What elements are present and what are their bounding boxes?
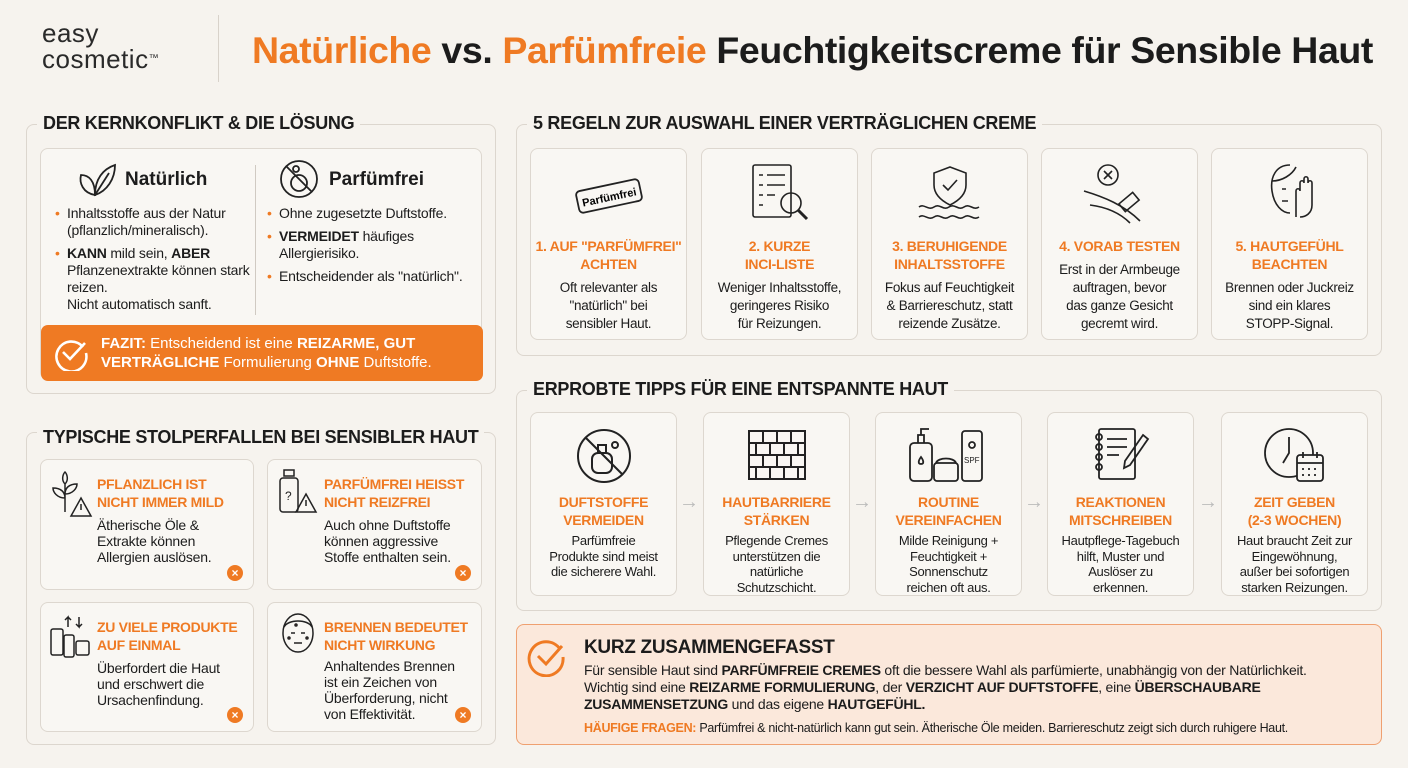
card: zu viele produkte: Ursachenfindung. [97,692,204,708]
card: duftstoffe vermeiden: Parfümfreie [572,533,635,548]
icon: products [50,615,90,658]
icon: irritated face [282,613,314,653]
card: pflanzlich: × [231,566,238,580]
card: pflanzlich [40,459,254,590]
card: brennen: ist ein Zeichen von [324,674,437,690]
card: reaktionen [1047,412,1194,596]
card: regel 4: auftragen, bevor [1073,280,1166,295]
card: brennen: NICHT WIRKUNG [324,637,435,653]
column: parfümfrei [268,160,463,284]
icon: shield waves [918,166,980,219]
arrow: → [852,491,872,513]
card: hautbarriere: STÄRKEN [744,512,809,528]
card: zu viele produkte: ZU VIELE PRODUKTE [97,619,237,635]
callout: fazit: FAZIT: Entscheidend ist eine REIZARME, GUT VERTRÄGLICHE Formulierung OHNE Duftstoffe. [101,335,432,371]
card: regel 5: 5. HAUTGEFÜHL [1235,238,1344,254]
inner comparison box [40,148,482,380]
icon: list magnifier [752,164,808,220]
title: Natürliche vs. Parfümfreie Feuchtigkeitscreme für Sensible Haut [252,29,1373,71]
card: reaktionen: REAKTIONEN [1076,494,1165,510]
icon: brick wall [748,430,806,480]
card: hautbarriere: HAUTBARRIERE [722,494,831,510]
card: regel 5: Brennen oder Juckreiz [1225,280,1354,295]
icon: plant warning [52,471,92,517]
icon: products: SPF [964,456,979,465]
icon: no perfume [577,429,631,483]
card: regel 2: Weniger Inhaltsstoffe, [718,280,841,295]
card: routine [875,412,1022,596]
text: summary: Wichtig sind eine REIZARME FORMULIERUNG, der VERZICHT AUF DUFTSTOFFE, eine ÜBERSCHAUBARE [584,679,1261,695]
card: routine: VEREINFACHEN [895,512,1002,528]
card: duftstoffe vermeiden: Produkte sind meist [549,548,658,564]
panel: 5 regeln [516,124,1382,356]
card: regel 5 [1211,148,1368,340]
heading: kurz zusammengefasst: KURZ ZUSAMMENGEFASST [584,637,835,658]
column: parfümfrei: Entscheidender als "natürlich". [279,268,463,284]
card: routine: Feuchtigkeit + [910,548,987,564]
card: duftstoffe vermeiden: DUFTSTOFFE [559,494,648,510]
panel: kernkonflikt [26,124,496,394]
card: routine: Sonnenschutz [909,564,988,579]
card: regel 3: INHALTSSTOFFE [894,256,1005,272]
card: reaktionen: Auslöser zu [1088,564,1153,579]
icon: bottle warning [279,469,318,513]
card: parfümfrei heisst: Auch ohne Duftstoffe [324,517,450,533]
logo: cosmetic™ [42,44,159,74]
card: routine: reichen oft aus. [906,580,991,594]
heading: stolperfallen: TYPISCHE STOLPERFALLEN BEI SENSIBLER HAUT [43,427,478,447]
card: duftstoffe vermeiden [530,412,677,596]
card: brennen: Überforderung, nicht [324,690,448,706]
card: duftstoffe vermeiden: die sicherere Wahl. [551,564,656,579]
icon: no perfume [280,160,318,198]
card: brennen: Anhaltendes Brennen [324,658,455,674]
card: pflanzlich: Allergien auslösen. [97,549,212,565]
panel: tipps [516,390,1382,611]
card: regel 2: 2. KURZE [749,238,810,254]
column: parfümfrei: Ohne zugesetzte Duftstoffe. [279,205,447,221]
card: regel 2: INCI-LISTE [745,256,814,272]
icon: notebook [1095,428,1150,480]
card: reaktionen: MITSCHREIBEN [1069,512,1172,528]
card: regel 2: geringeres Risiko [730,298,829,313]
card: regel 5: BEACHTEN [1252,256,1327,272]
heading: 5 regeln: 5 REGELN ZUR AUSWAHL EINER VERTRÄGLICHEN CREME [533,113,1036,133]
card: regel 4: Erst in der Armbeuge [1059,262,1180,277]
card: routine: Milde Reinigung + [899,533,998,548]
card: zu viele produkte: AUF EINMAL [97,637,180,653]
card: regel 3: reizende Zusätze. [898,316,1001,331]
card: zu viele produkte [40,602,254,732]
card: zeit geben: außer bei sofortigen [1240,564,1349,579]
card: brennen: × [459,708,466,722]
icon: products [909,428,983,482]
callout: fazit [41,325,483,381]
card: pflanzlich: Extrakte können [97,533,195,549]
card: pflanzlich: NICHT IMMER MILD [97,494,224,510]
arrow: → [679,491,699,513]
card: parfümfrei heisst: können aggressive [324,533,438,549]
card: regel 4 [1041,148,1198,340]
card: regel 4: 4. VORAB TESTEN [1059,238,1180,254]
icon: clock calendar [1264,428,1324,482]
heading: kernkonflikt: DER KERNKONFLIKT & DIE LÖSUNG [43,113,354,133]
card: parfümfrei heisst: PARFÜMFREI HEISST [324,476,464,492]
column: parfümfrei: Parfümfrei [329,169,424,190]
card: brennen [267,602,482,732]
card: hautbarriere [703,412,850,596]
icon: leaf [80,164,116,196]
icon: check circle [55,340,88,371]
icon: check circle [528,640,565,677]
card: hautbarriere: Pflegende Cremes [725,533,828,548]
card: pflanzlich: PFLANZLICH IST [97,476,206,492]
card: hautbarriere: unterstützen die [733,548,820,564]
card: parfümfrei heisst [267,459,482,590]
card: regel 5: STOPP-Signal. [1246,316,1333,331]
icon: stamp parfümfrei: Parfümfrei [581,186,637,210]
card: regel 1: 1. AUF "PARFÜMFREI" [535,238,682,254]
card: regel 1: ACHTEN [580,256,637,272]
card: zeit geben: Eingewöhnung, [1252,548,1337,564]
card: regel 1: "natürlich" bei [570,298,647,313]
card: hautbarriere: Schutzschicht. [737,580,816,594]
text: summary [584,662,1307,712]
card: parfümfrei heisst: NICHT REIZFREI [324,494,430,510]
heading: tipps: ERPROBTE TIPPS FÜR EINE ENTSPANNTE HAUT [533,379,948,399]
card: routine: ROUTINE [918,494,979,510]
card: reaktionen: erkennen. [1093,580,1148,594]
text: summary: ZUSAMMENSETZUNG und das eigene HAUTGEFÜHL. [584,696,925,712]
column: parfümfrei: VERMEIDET häufiges Allergierisiko. [279,228,414,261]
arrow: → [1024,491,1044,513]
card: pflanzlich: Ätherische Öle & [97,517,199,533]
card: zeit geben: Haut braucht Zeit zur [1237,533,1352,548]
card: regel 2: für Reizungen. [738,316,821,331]
card: zu viele produkte: und erschwert die [97,676,204,692]
card: regel 5: sind ein klares [1249,298,1330,313]
card: brennen: BRENNEN BEDEUTET [324,619,468,635]
card: duftstoffe vermeiden: VERMEIDEN [563,512,644,528]
icon: face hand [1270,164,1313,218]
card: regel 4: das ganze Gesicht [1066,298,1173,313]
logo: easy [42,18,99,48]
card: regel 2 [701,148,858,340]
panel: stolperfallen [26,432,496,745]
column: natürlich: Inhaltsstoffe aus der Natur (pflanzlich/mineralisch). [67,205,226,238]
card: zu viele produkte: × [231,708,238,722]
logo [42,18,159,74]
card: regel 3: 3. BERUHIGENDE [892,238,1007,254]
card: regel 3: Fokus auf Feuchtigkeit [885,280,1014,295]
card: regel 3: & Barriereschutz, statt [887,298,1012,313]
card: zeit geben: (2-3 WOCHEN) [1248,512,1341,528]
column: natürlich: Natürlich [125,169,207,190]
card: parfümfrei heisst: × [459,566,466,580]
text: summary: Für sensible Haut sind PARFÜMFREIE CREMES oft die bessere Wahl als parfümierte, unabhängig von der Natürlichkeit. [584,662,1307,678]
card: regel 1 [530,148,687,340]
card: reaktionen: hilft, Muster und [1077,548,1164,564]
card: regel 1: sensibler Haut. [566,316,651,331]
text: faq: HÄUFIGE FRAGEN: Parfümfrei & nicht-natürlich kann gut sein. Ätherische Öle meiden. Barriereschutz zeigt sich durch ruhigere Haut. [584,721,1288,735]
panel: kurz zusammengefasst [516,624,1382,745]
icon: bottle warning: ? [285,489,292,503]
card: regel 3 [871,148,1028,340]
card: parfümfrei heisst: Stoffe enthalten sein. [324,549,451,565]
column: natürlich: Nicht automatisch sanft. [67,296,212,312]
card: zeit geben: ZEIT GEBEN [1254,494,1335,510]
column: natürlich: KANN mild sein, ABER Pflanzenextrakte können stark reizen. [67,245,250,295]
card: regel 4: gecremt wird. [1081,316,1158,331]
icon: arm test [1084,164,1140,224]
card: brennen: von Effektivität. [324,706,415,722]
card: zeit geben: starken Reizungen. [1241,580,1348,594]
card: reaktionen: Hautpflege-Tagebuch [1062,533,1179,548]
column: natürlich [56,164,250,312]
card: hautbarriere: natürliche [750,564,803,579]
card: zu viele produkte: Überfordert die Haut [97,660,220,676]
arrow: → [1198,491,1218,513]
icon: stamp parfümfrei [575,178,643,214]
card: zeit geben [1221,412,1368,596]
card: regel 1: Oft relevanter als [560,280,657,295]
